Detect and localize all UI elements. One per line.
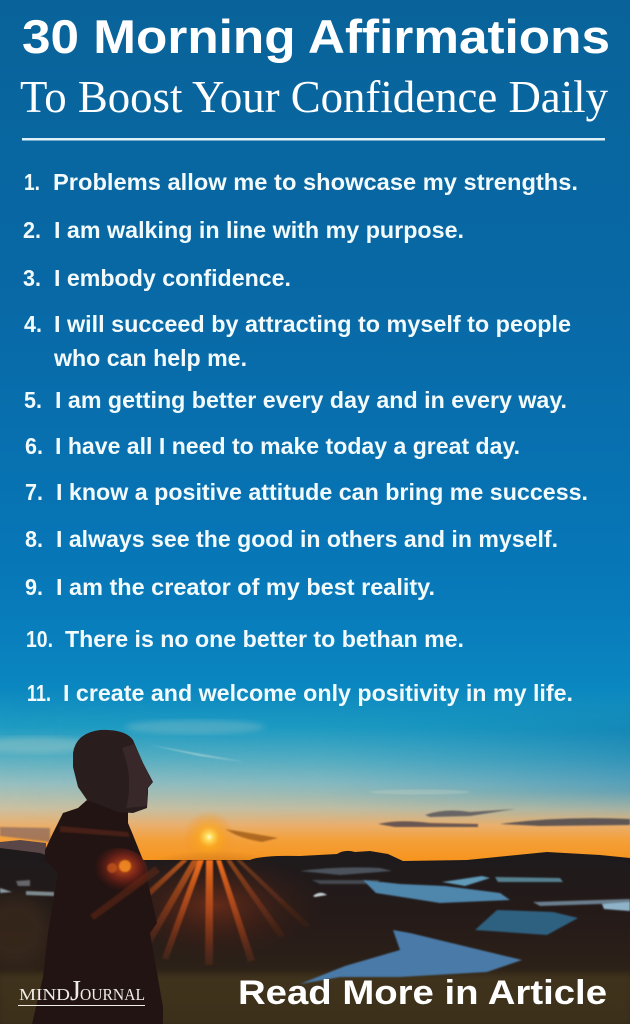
item 9: 9. bbox=[25, 574, 43, 600]
divider line bbox=[22, 138, 605, 140]
face shading bbox=[122, 744, 152, 808]
lens flare bbox=[88, 848, 148, 896]
left bushes bbox=[0, 895, 50, 965]
item 8: 8. bbox=[25, 526, 43, 552]
item 7: 7. bbox=[25, 479, 43, 505]
item 4 bbox=[24, 311, 571, 371]
head bbox=[73, 730, 153, 813]
background: blue sky gradient bbox=[0, 258, 630, 861]
body and hoodie bbox=[32, 800, 163, 1024]
logo: MindJournal bbox=[18, 976, 145, 1007]
title: 30 Morning Affirmations bbox=[22, 10, 610, 63]
item 7: I know a positive attitude can bring me success. bbox=[56, 479, 588, 505]
flare streaks across body bbox=[90, 866, 160, 920]
logo: MindJournal: OURNAL bbox=[80, 985, 145, 1004]
item 6: I have all I need to make today a great day. bbox=[55, 433, 520, 459]
item 3: 3. bbox=[23, 265, 41, 291]
greenhouses bbox=[0, 867, 630, 984]
sky clouds bbox=[0, 720, 630, 842]
item 11: I create and welcome only positivity in my life. bbox=[63, 680, 573, 706]
item 1: 1. bbox=[24, 169, 40, 195]
sun rays bbox=[115, 860, 310, 965]
logo: MindJournal: MIND bbox=[19, 985, 70, 1004]
item 1: Problems allow me to showcase my strengths. bbox=[53, 169, 578, 195]
item 4: I will succeed by attracting to myself to people bbox=[54, 311, 571, 337]
item 11: 11. bbox=[27, 680, 51, 706]
subtitle: To Boost Your Confidence Daily bbox=[20, 71, 608, 122]
person silhouette bbox=[32, 730, 163, 1024]
distant hills bbox=[0, 840, 46, 856]
item 5: 5. bbox=[24, 387, 42, 413]
item 8: I always see the good in others and in myself. bbox=[56, 526, 558, 552]
item 9: I am the creator of my best reality. bbox=[56, 574, 435, 600]
photo: sunset landscape bbox=[0, 720, 630, 1024]
item 2: 2. bbox=[23, 217, 41, 243]
item 10: 10. bbox=[26, 626, 53, 652]
item 4: who can help me. bbox=[53, 345, 247, 371]
call to action: read more: Read More in Article bbox=[238, 974, 607, 1012]
warm field glow bbox=[105, 850, 325, 960]
foreground field bbox=[0, 975, 630, 1024]
item 2: I am walking in line with my purpose. bbox=[54, 217, 464, 243]
item 3: I embody confidence. bbox=[54, 265, 291, 291]
item 10: There is no one better to bethan me. bbox=[65, 626, 464, 652]
logo: MindJournal: J bbox=[70, 976, 81, 1007]
item 4: 4. bbox=[24, 311, 42, 337]
sun bbox=[183, 811, 235, 863]
item 5: I am getting better every day and in every way. bbox=[55, 387, 567, 413]
affirmations list bbox=[23, 169, 588, 706]
item 6: 6. bbox=[25, 433, 43, 459]
ground bbox=[0, 848, 630, 1024]
